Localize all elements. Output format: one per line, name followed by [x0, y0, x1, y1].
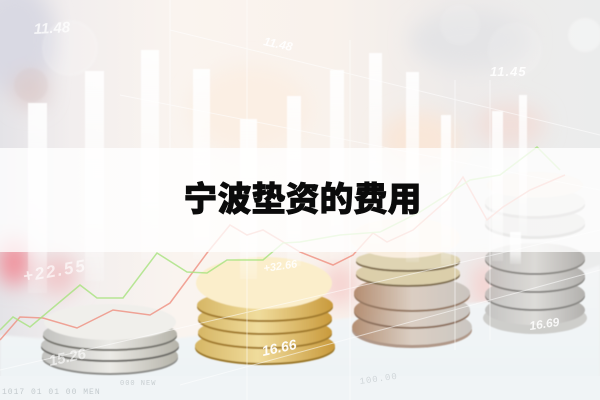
paper with printed numbers: 100.00: [359, 372, 398, 387]
chart number labels: 11.45: [490, 64, 527, 79]
chart number labels: 11.48: [262, 34, 294, 54]
chart number labels: 16.69: [528, 315, 560, 333]
title: 宁波垫资的费用: [184, 181, 422, 219]
translucent title band: [0, 148, 600, 252]
white bar chart: [28, 50, 527, 293]
chart number labels: 15.26: [47, 345, 88, 370]
paper with printed numbers: 1017 01 01 00 MEN: [2, 388, 101, 397]
chart number labels: 11.48: [33, 19, 71, 38]
paper with printed numbers: [0, 265, 600, 400]
red trend line: [0, 175, 565, 340]
chart number labels: +32.66: [263, 258, 299, 275]
green trend line: [0, 147, 560, 330]
coin stack: silver: [41, 304, 179, 375]
coin stack: copper and silver: [350, 218, 472, 348]
paper with printed numbers: 000 NEW: [120, 380, 156, 388]
soft colour patches: [0, 0, 545, 309]
bokeh circles: [14, 5, 600, 102]
coin stack: gold: [195, 257, 335, 365]
chart number labels: +22.55: [21, 256, 88, 286]
chart number labels: [21, 19, 560, 370]
chart number labels: 16.66: [260, 336, 298, 359]
coin stack: grey: [483, 172, 587, 334]
